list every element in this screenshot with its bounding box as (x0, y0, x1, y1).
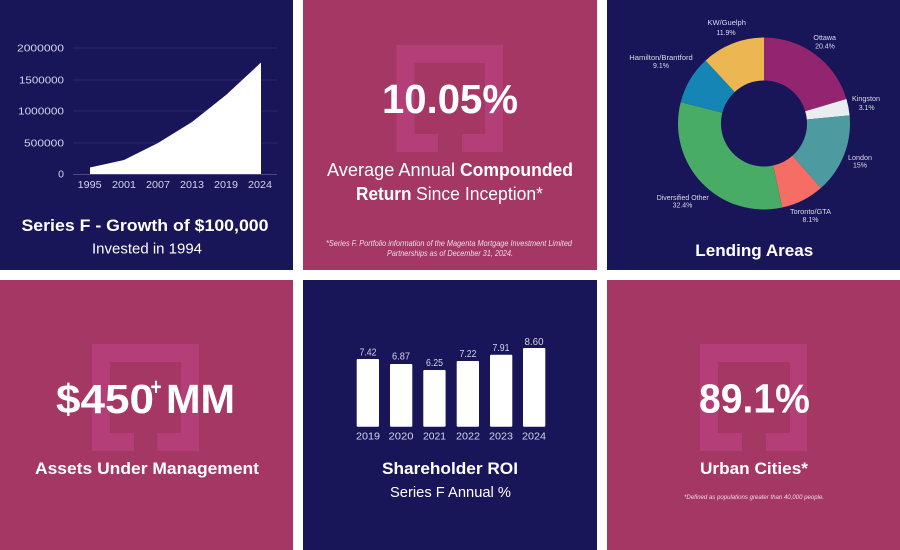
donut labels: Kingston (852, 96, 880, 103)
panel: assets under management (0, 280, 293, 550)
subheading: invested: Invested in 1994 (92, 240, 202, 258)
text block: return description: Compounded (460, 160, 573, 180)
panel: growth of $100,000 (0, 0, 293, 270)
donut labels: Hamilton/Brantford (629, 55, 693, 62)
area chart: growth: 1500000 (19, 74, 64, 86)
icon: logo watermark (92, 344, 199, 451)
donut labels (629, 20, 880, 224)
big number: $450+ MM (56, 374, 235, 422)
footnote: series F: Partnerships as of December 31, 2024. (387, 248, 513, 258)
area chart: growth: 2000000 (17, 42, 64, 54)
bar chart: shareholder ROI: 6.25 (426, 357, 443, 369)
footnote: series F: *Series F. Portfolio information of the Magenta Mortgage Investment Limited (326, 238, 572, 248)
donut labels: 3.1% (859, 105, 875, 112)
panel: compounded return (303, 0, 597, 270)
donut labels: KW/Guelph (707, 20, 746, 27)
donut labels: 9.1% (653, 63, 669, 70)
bar chart: shareholder ROI: 2023 (489, 430, 513, 442)
bar chart: shareholder ROI: 2020 (388, 430, 414, 442)
heading: assets under management: Assets Under Management (35, 459, 259, 478)
heading: shareholder ROI: Shareholder ROI (382, 459, 518, 478)
area chart: growth (17, 42, 277, 191)
big number: 10.05%: 10.05% (382, 76, 518, 122)
heading: growth: Series F - Growth of $100,000 (22, 216, 268, 235)
donut chart: lending areas (678, 38, 850, 210)
donut labels: 11.9% (716, 30, 736, 37)
big number: $450+ MM: + (150, 374, 162, 401)
donut labels: Ottawa (813, 35, 836, 42)
panel: shareholder ROI (303, 280, 597, 550)
donut labels: 15% (853, 162, 867, 170)
text block: return description (327, 160, 573, 204)
donut labels: Diversified Other (657, 195, 709, 202)
heading: urban cities: Urban Cities* (700, 459, 808, 478)
heading: lending areas: Lending Areas (695, 241, 813, 260)
bar chart: shareholder ROI: 7.22 (460, 348, 477, 360)
area chart: growth: 0 (58, 168, 64, 180)
icon: logo watermark (700, 344, 807, 451)
subheading: series F annual: Series F Annual % (390, 484, 511, 501)
area chart: growth: 500000 (24, 138, 64, 150)
panel: lending areas (607, 0, 900, 270)
text block: return description: Since Inception* (416, 184, 543, 204)
icon: logo watermark (396, 45, 503, 152)
bar chart: shareholder ROI: 7.42 (360, 346, 377, 358)
bar chart: shareholder ROI: 2022 (456, 430, 480, 442)
bar chart: shareholder ROI: 2021 (423, 430, 446, 442)
footnote: series F (326, 238, 572, 258)
donut labels: 32.4% (673, 202, 692, 210)
donut labels: 20.4% (815, 44, 835, 50)
footnote: urban definition: *Defined as populations greater than 40,000 people. (684, 495, 824, 501)
bar chart: shareholder ROI: 7.91 (492, 342, 510, 354)
area chart: growth: 2013 (180, 179, 204, 191)
big number: $450+ MM: MM (166, 376, 235, 422)
area chart: growth: 2024 (248, 179, 272, 191)
big number: 89.1%: 89.1% (699, 376, 810, 422)
bar chart: shareholder ROI: 2019 (356, 430, 380, 442)
area chart: growth: 2001 (112, 179, 136, 191)
area chart: growth: 1995 (78, 179, 102, 191)
text block: return description: Average Annual (327, 160, 455, 180)
big number: $450+ MM: $450 (56, 376, 154, 422)
text block: return description: Return (356, 184, 412, 204)
bar chart: shareholder ROI (356, 336, 546, 442)
bar chart: shareholder ROI: 8.60 (524, 336, 544, 348)
area chart: growth: 2019 (214, 179, 238, 191)
bar chart: shareholder ROI: 2024 (522, 430, 546, 442)
panel: urban cities (607, 280, 900, 550)
area chart: growth: 1000000 (18, 106, 64, 118)
donut labels: London (848, 155, 872, 162)
donut labels: Toronto/GTA (790, 209, 831, 216)
bar chart: shareholder ROI: 6.87 (392, 350, 410, 362)
area chart: growth: 2007 (146, 179, 170, 191)
donut labels: 8.1% (803, 217, 818, 224)
